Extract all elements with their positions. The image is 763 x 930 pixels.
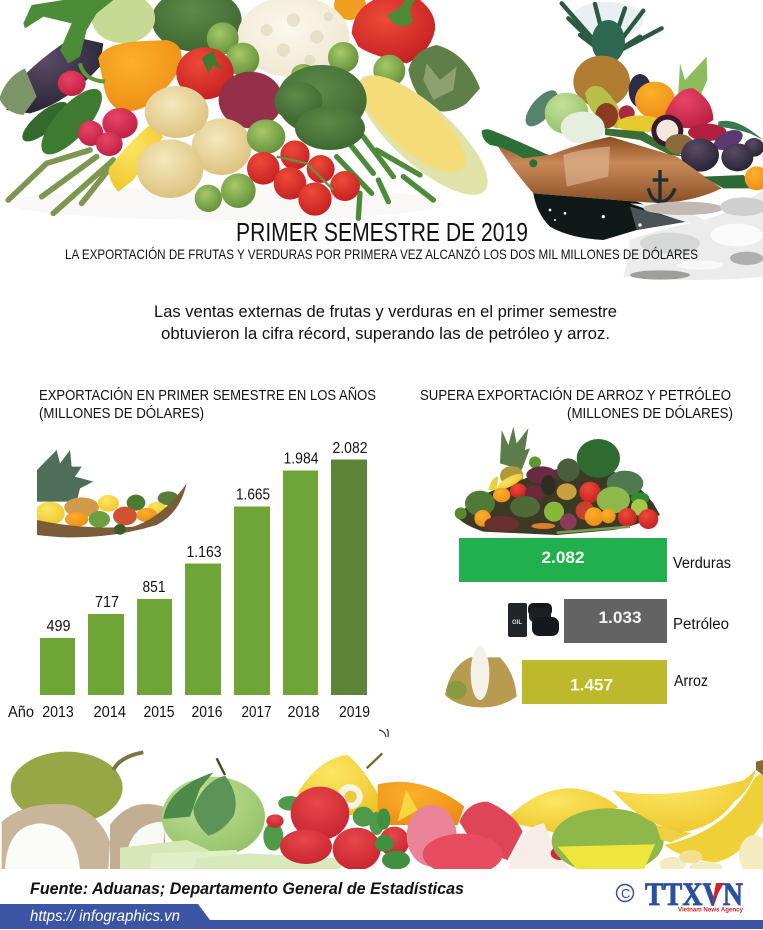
icon: rice <box>445 647 517 707</box>
intro text: Las ventas externas de frutas y verduras en el primer semestre <box>154 302 617 321</box>
illustration: fruit strip <box>2 752 763 875</box>
mangosteen flesh <box>656 120 678 142</box>
bar 2015: 851 <box>142 579 166 596</box>
asparagus <box>8 150 113 213</box>
banana top <box>613 770 756 832</box>
bar 2014 <box>88 594 126 721</box>
bar 2019: 2019 <box>339 704 370 721</box>
banana stem <box>756 760 763 775</box>
illustration: vegetables <box>0 0 504 220</box>
purple plum <box>711 126 746 154</box>
cauliflower <box>237 0 349 77</box>
pineapple body <box>500 466 523 486</box>
guava leaves <box>163 772 236 836</box>
lime <box>529 456 541 468</box>
red pepper <box>352 0 435 63</box>
cherry tomatoes <box>247 140 360 216</box>
banana front <box>664 772 763 862</box>
fruit moss <box>703 175 757 188</box>
bar 2013: 499 <box>46 618 71 635</box>
flower <box>337 784 363 809</box>
icon: oil barrels: OIL <box>512 620 522 626</box>
star fruit stem <box>367 753 382 768</box>
basket leaf <box>114 524 126 535</box>
bar chart: exports by year <box>8 440 370 721</box>
orange pepper <box>80 40 182 112</box>
clouds <box>623 190 763 280</box>
icon: oil barrels <box>508 603 559 637</box>
lime flesh <box>558 844 655 870</box>
pile base <box>457 466 660 535</box>
bar 2017: 2017 <box>242 704 272 721</box>
leaf greens <box>23 0 113 63</box>
heading: left chart: EXPORTACIÓN EN PRIMER SEMESTRE EN LOS AÑOS <box>39 387 376 404</box>
mangosteen <box>651 115 683 147</box>
bar: vegetables: 2.082 <box>542 548 584 567</box>
bar 2014: 2014 <box>94 704 126 721</box>
source text: Fuente: Aduanas; Departamento General de Estadísticas <box>30 879 464 898</box>
bar 2018: 2018 <box>288 704 320 721</box>
grapes <box>629 74 651 107</box>
strawberry <box>380 826 408 854</box>
coconut husk left <box>2 804 110 870</box>
guava slice <box>561 112 605 144</box>
mango <box>635 82 675 118</box>
bar: oil: 1.033 <box>598 608 642 627</box>
bar: vegetables <box>459 538 731 582</box>
artichoke <box>408 45 480 111</box>
grey hull shading <box>630 207 687 230</box>
guava <box>162 777 265 857</box>
red onion <box>219 72 283 128</box>
heading: right chart: SUPERA EXPORTACIÓN DE ARROZ Y PETRÓLEO <box>420 387 731 404</box>
bar 2019 <box>331 440 370 721</box>
leaves <box>375 808 410 869</box>
right fruits <box>375 760 763 875</box>
red spot <box>550 848 562 860</box>
bar 2017 <box>234 486 272 721</box>
coconut flesh right <box>128 822 165 847</box>
basket <box>37 483 187 537</box>
black hull <box>533 193 687 240</box>
savoy cabbage <box>152 0 242 52</box>
small orange pepper top <box>334 0 366 20</box>
avocado pit <box>595 103 618 128</box>
tomato vine <box>277 157 333 190</box>
broccoli <box>274 65 367 150</box>
coconut <box>11 752 123 824</box>
bar 2016: 2016 <box>192 704 223 721</box>
left fruits <box>2 752 384 870</box>
bar 2015 <box>137 579 175 721</box>
footer url: https:// infographics.vn <box>30 908 180 925</box>
small strawberry <box>266 814 284 828</box>
avocado <box>585 86 626 128</box>
bar 2018: 1.984 <box>284 450 319 468</box>
guava <box>545 93 589 134</box>
moss rail <box>605 128 683 157</box>
cucumbers <box>17 80 111 163</box>
wordmark: TTXVN <box>645 877 743 913</box>
bar: vegetables: Verduras <box>673 555 731 572</box>
red rose apple <box>459 802 523 860</box>
star fruit cut <box>378 782 464 825</box>
tomato <box>176 47 234 99</box>
heading: left chart: (MILLONES DE DÓLARES) <box>39 405 204 422</box>
strawberries <box>280 787 381 870</box>
heading: right chart <box>420 387 733 422</box>
guava stem <box>217 758 225 775</box>
bar 2015: 2015 <box>144 704 175 721</box>
bar 2019: 2.082 <box>332 440 368 457</box>
banana slices <box>659 835 763 875</box>
axis label: Año <box>8 704 34 721</box>
pineapple <box>64 497 99 517</box>
dragon fruit leaves <box>678 57 707 97</box>
pineapple body <box>573 56 630 108</box>
green leaf <box>718 121 763 140</box>
star point <box>398 790 418 822</box>
bar 2017: 1.665 <box>236 486 270 504</box>
dragon fruit <box>665 88 713 128</box>
coconut flesh left <box>5 823 80 870</box>
porthole <box>529 159 537 167</box>
lime <box>552 808 664 874</box>
produce <box>455 458 658 533</box>
rose apple front <box>422 834 502 869</box>
red accent <box>712 883 724 904</box>
strawberry leaves <box>263 796 384 851</box>
bar: rice <box>522 660 708 704</box>
stray mark <box>379 729 388 737</box>
bar 2016 <box>185 544 223 721</box>
fruit cluster <box>35 491 179 528</box>
coconut stem <box>113 752 143 770</box>
anchor <box>648 170 675 202</box>
star fruit <box>298 755 382 815</box>
pineapple crown <box>500 427 530 470</box>
green beans <box>337 137 433 218</box>
sky glow <box>570 2 643 38</box>
intro text: obtuvieron la cifra récord, superando las de petróleo y arroz. <box>161 324 610 343</box>
bar: rice: Arroz <box>674 673 708 690</box>
potatoes <box>137 86 252 198</box>
bow moss <box>482 129 548 158</box>
kohlrabi <box>92 0 155 43</box>
bar 2016: 1.163 <box>186 544 222 561</box>
kiwi <box>665 134 693 154</box>
pineapple leaves <box>37 450 93 502</box>
orange <box>510 788 618 832</box>
illustration: fruit ship <box>482 2 763 280</box>
footer bar <box>0 904 763 929</box>
coconut husk right <box>110 804 167 870</box>
sprouts lower <box>195 119 285 212</box>
heading: left chart <box>39 387 376 422</box>
ground shadow <box>10 187 443 220</box>
orange slice <box>745 166 763 190</box>
bar 2013 <box>40 618 75 721</box>
tagline: Vietnam News Agency <box>678 908 744 914</box>
title: PRIMER SEMESTRE DE 2019 <box>236 217 528 247</box>
bar: oil: Petróleo <box>673 616 729 633</box>
illustration: fruit basket <box>35 450 187 537</box>
copyright: C <box>621 886 630 901</box>
logo: TTXVN <box>616 877 744 914</box>
pink rose apple <box>407 805 457 866</box>
yellow squash <box>108 125 163 192</box>
leaf <box>520 85 563 132</box>
pineapple leaves <box>562 3 662 57</box>
sparkles <box>549 209 642 227</box>
pineapple crown <box>592 20 625 63</box>
flower center <box>345 791 357 803</box>
corn <box>341 57 504 213</box>
radish small <box>58 71 86 96</box>
guava slices <box>120 840 343 870</box>
red plum small <box>619 105 635 121</box>
bar: oil <box>564 599 729 643</box>
intro text <box>154 302 617 343</box>
sprouts upper <box>207 22 405 87</box>
eggplant <box>7 37 103 113</box>
dark plums <box>681 138 763 172</box>
bar 2014: 717 <box>95 594 119 611</box>
hull <box>495 137 722 203</box>
yellow mango <box>617 115 663 133</box>
bar 2018 <box>283 450 320 721</box>
heading: right chart: (MILLONES DE DÓLARES) <box>567 405 733 422</box>
illustration: fruit pile <box>455 427 660 535</box>
greens <box>577 439 620 478</box>
white rose apple <box>508 823 571 870</box>
radishes <box>78 108 138 156</box>
hull highlight <box>563 147 610 187</box>
eggplant calyx <box>0 68 37 115</box>
bar 2013: 2013 <box>42 704 74 721</box>
bar: rice: 1.457 <box>570 676 613 694</box>
banana back <box>656 825 691 842</box>
red fruit <box>688 124 727 141</box>
